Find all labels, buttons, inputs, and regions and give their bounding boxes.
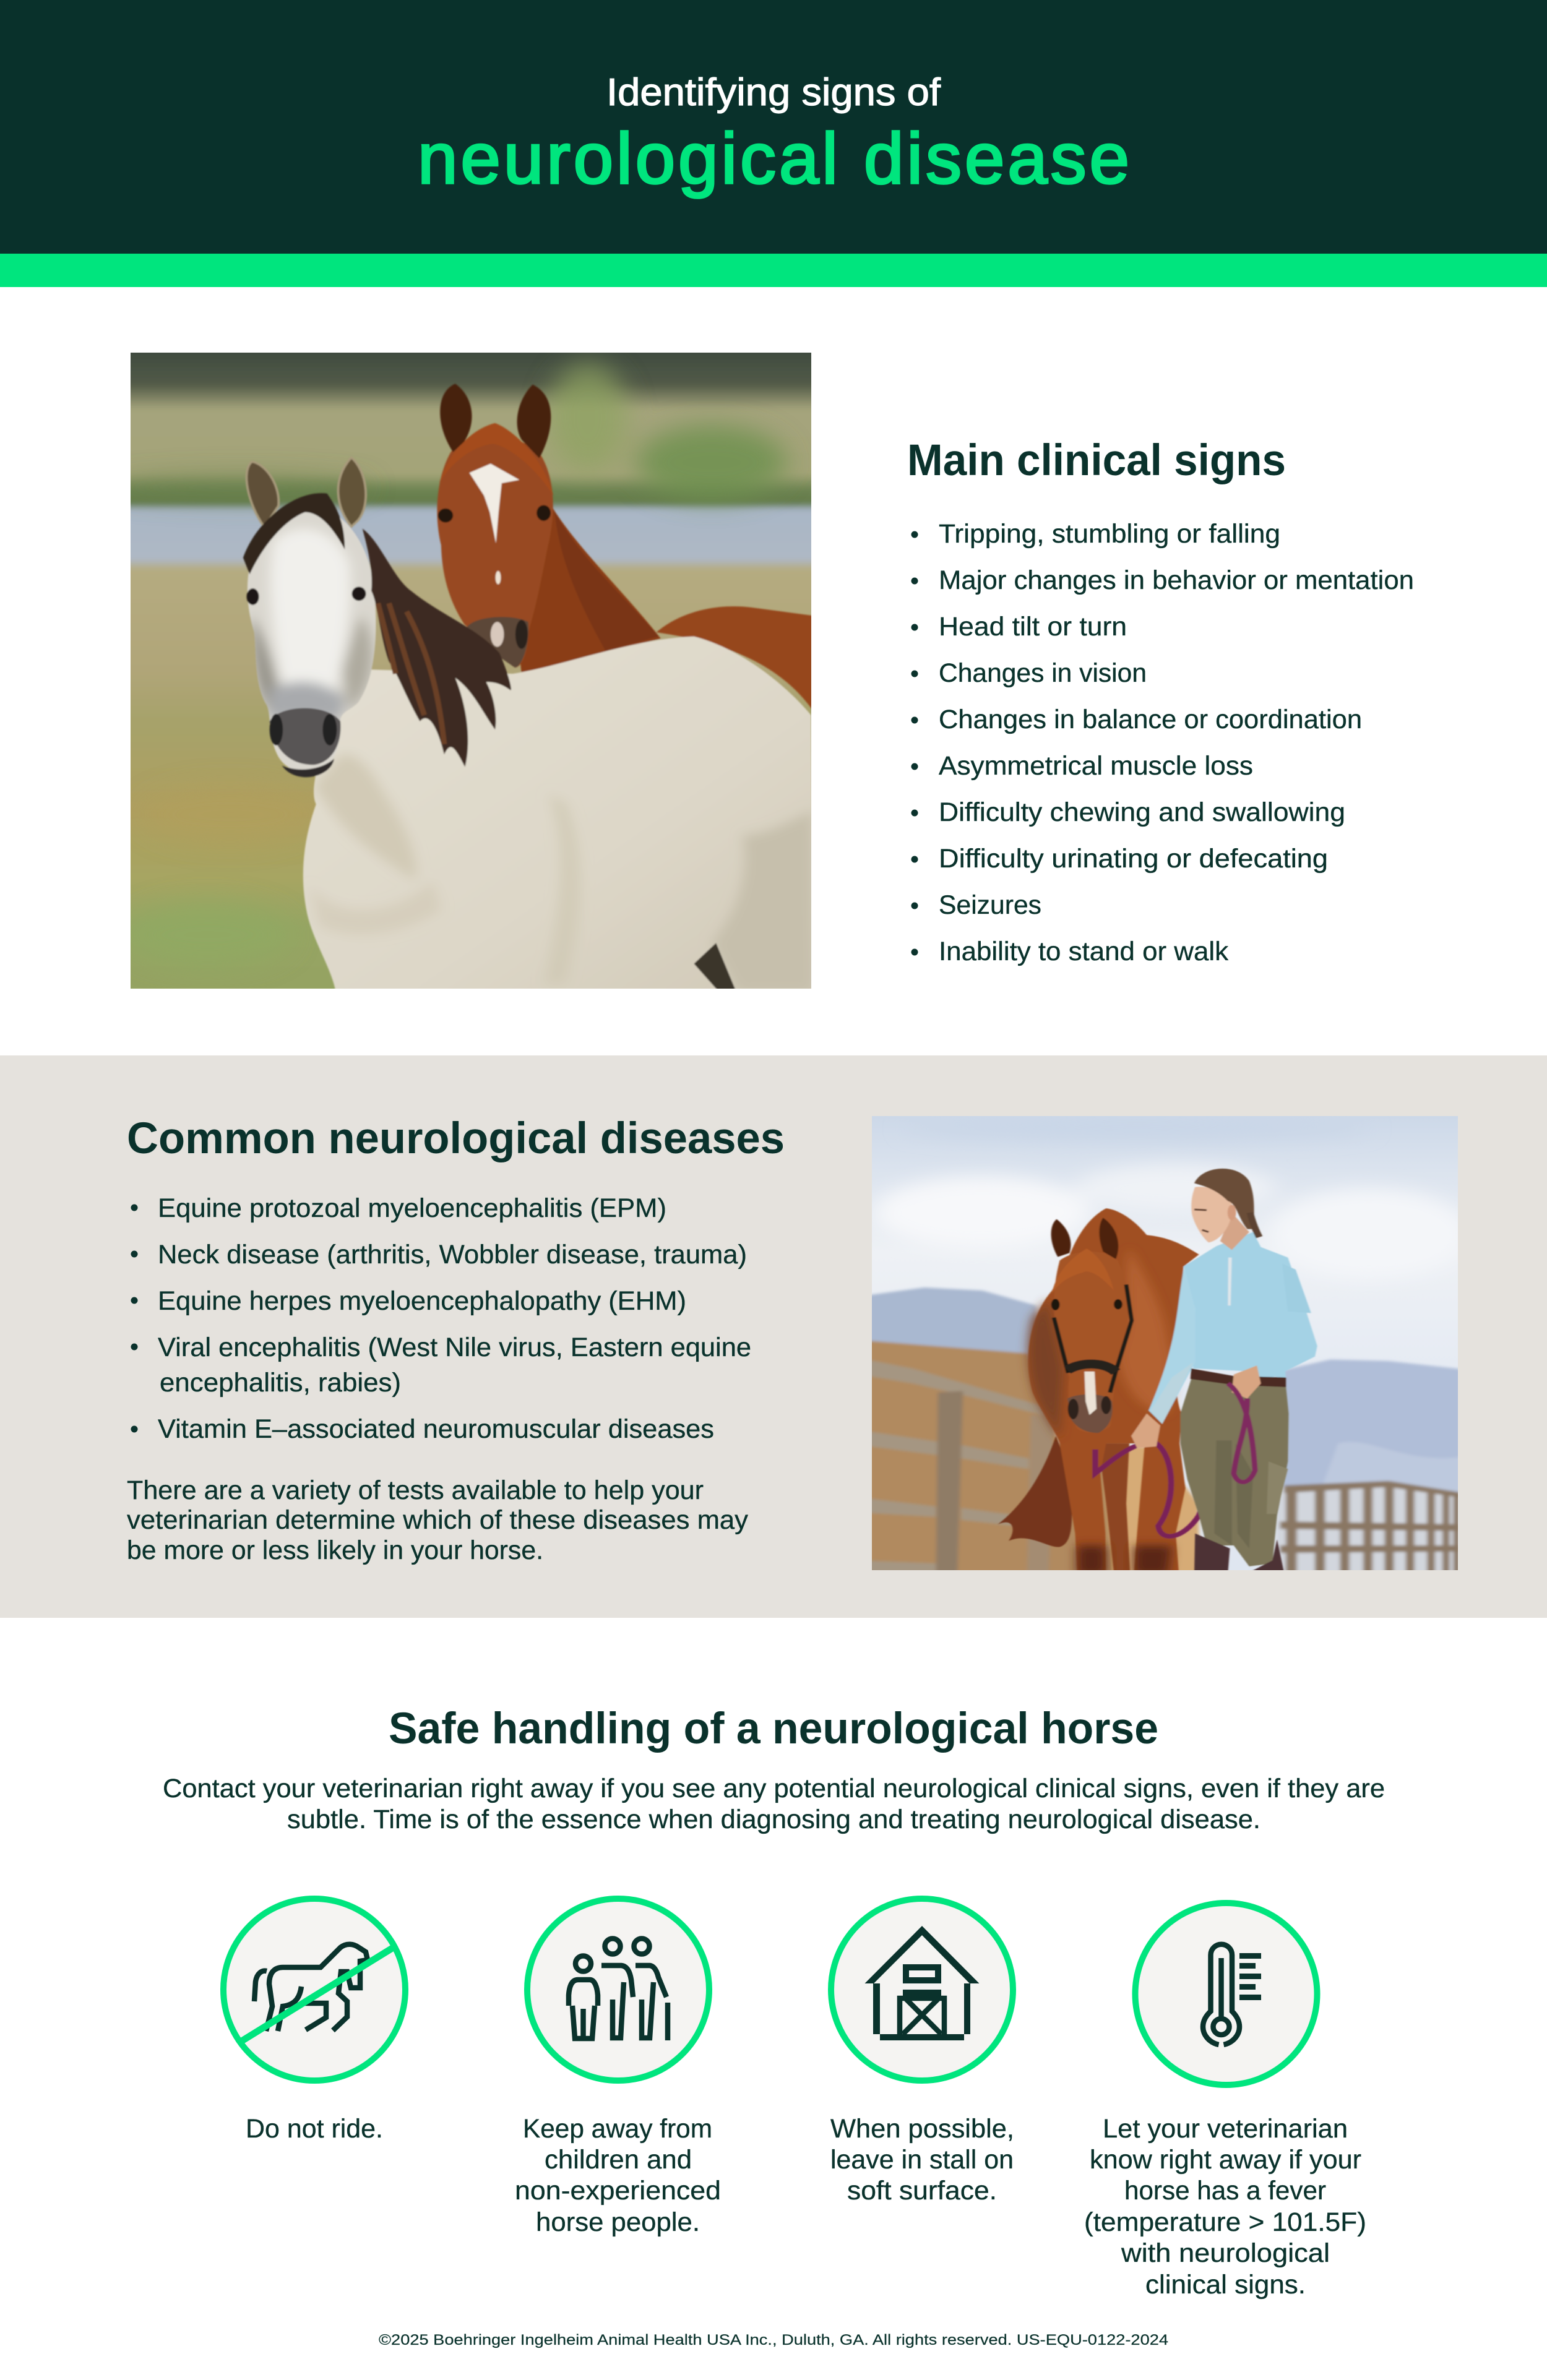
title line one: Identifying signs of xyxy=(606,71,941,114)
woman trousers xyxy=(1181,1379,1288,1566)
mane xyxy=(243,493,345,574)
white body xyxy=(303,637,813,993)
caption: stall xyxy=(830,2114,1014,2206)
footer copyright: ©2025 Boehringer Ingelheim Animal Health USA Inc., Duluth, GA. All rights reserved. US-EQU-0122-2024 xyxy=(379,2332,1168,2348)
paragraph: contact your veterinarian: Contact your veterinarian right away if you see any potential neurological clinical signs, even if they are xyxy=(163,1774,1385,1803)
icon: do not ride xyxy=(223,1899,405,2081)
caption: do not ride: Do not ride. xyxy=(246,2114,383,2144)
list: main clinical signs: Asymmetrical muscle loss xyxy=(939,751,1253,781)
left fence xyxy=(872,1360,1044,1570)
list: main clinical signs: Head tilt or turn xyxy=(939,612,1127,642)
list: main clinical signs: Tripping, stumbling or falling xyxy=(939,519,1280,549)
right fence xyxy=(1276,1487,1455,1570)
caption: keep away: Keep away from xyxy=(523,2114,712,2144)
rope loop xyxy=(1228,1383,1255,1482)
list: main clinical signs: Major changes in behavior or mentation xyxy=(939,565,1414,595)
caption: fever: (temperature > 101.5F) xyxy=(1084,2207,1366,2237)
heading: safe handling: Safe handling of a neurological horse xyxy=(389,1704,1158,1753)
caption: fever: clinical signs. xyxy=(1145,2270,1306,2300)
list: diseases: Vitamin E–associated neuromuscular diseases xyxy=(158,1414,714,1444)
chestnut body xyxy=(657,606,813,711)
caption: fever: horse has a fever xyxy=(1124,2176,1326,2206)
title line two: neurological disease xyxy=(418,118,1129,199)
heading: common neurological diseases: Common neurological diseases xyxy=(127,1114,785,1163)
paragraph: tests available xyxy=(127,1476,748,1565)
list: main clinical signs: Changes in vision xyxy=(939,658,1147,688)
list: main clinical signs: Changes in balance or coordination xyxy=(939,705,1362,734)
list: main clinical signs: Inability to stand or walk xyxy=(939,937,1229,966)
caption: stall: When possible, xyxy=(830,2114,1014,2144)
paragraph: tests available: veterinarian determine which of these diseases may xyxy=(127,1505,748,1535)
list: diseases: Equine protozoal myeloencephalitis (EPM) xyxy=(158,1193,666,1223)
list: main clinical signs xyxy=(911,519,1414,966)
panel: common neurological diseases background xyxy=(0,1055,1547,1618)
paragraph: tests available: There are a variety of tests available to help your xyxy=(127,1476,704,1505)
caption: fever: with neurological xyxy=(1121,2238,1330,2268)
caption: keep away: non-experienced xyxy=(515,2176,721,2206)
icon: thermometer xyxy=(1135,1903,1317,2085)
barn wall and ground xyxy=(872,1339,1114,1570)
paragraph: tests available: be more or less likely in your horse. xyxy=(127,1536,543,1565)
list: main clinical signs: Difficulty urinating or defecating xyxy=(939,844,1328,874)
caption: keep away: horse people. xyxy=(536,2207,700,2237)
list: diseases: encephalitis, rabies) xyxy=(160,1368,401,1398)
caption: stall: leave in stall on xyxy=(830,2145,1014,2175)
caption: keep away: children and xyxy=(545,2145,692,2175)
caption: fever xyxy=(1084,2114,1366,2300)
list: diseases: Neck disease (arthritis, Wobbler disease, trauma) xyxy=(158,1240,747,1269)
woman shirt xyxy=(1183,1232,1317,1383)
caption: stall: soft surface. xyxy=(847,2176,997,2206)
list: diseases: Viral encephalitis (West Nile virus, Eastern equine xyxy=(158,1333,751,1362)
caption: fever: Let your veterinarian xyxy=(1103,2114,1348,2144)
list: diseases: Equine herpes myeloencephalopathy (EHM) xyxy=(158,1286,686,1316)
photo: woman leading chestnut horse xyxy=(859,1116,1470,1581)
horse body xyxy=(1028,1208,1199,1573)
heading: main clinical signs: Main clinical signs xyxy=(907,436,1286,485)
list: main clinical signs: Seizures xyxy=(939,890,1041,920)
header banner xyxy=(0,0,1547,287)
caption: fever: know right away if your xyxy=(1090,2145,1361,2175)
horse hind leg xyxy=(1098,1443,1130,1573)
icon: people xyxy=(527,1899,709,2081)
belt xyxy=(1191,1368,1286,1387)
list: main clinical signs: Difficulty chewing and swallowing xyxy=(939,797,1345,827)
icon: barn xyxy=(831,1899,1013,2081)
tail xyxy=(998,1436,1072,1547)
horse head xyxy=(1054,1252,1129,1433)
list: diseases xyxy=(131,1193,751,1444)
hands xyxy=(1232,1365,1261,1398)
white head xyxy=(248,508,376,772)
photo: white and chestnut horses in a field xyxy=(99,334,842,1008)
paragraph: contact your veterinarian: subtle. Time is of the essence when diagnosing and treating neurological disease. xyxy=(287,1805,1260,1834)
paragraph: contact your veterinarian xyxy=(163,1774,1385,1834)
caption: keep away xyxy=(515,2114,721,2237)
rope xyxy=(1095,1386,1224,1536)
woman neck, face, hair xyxy=(1220,1213,1249,1250)
